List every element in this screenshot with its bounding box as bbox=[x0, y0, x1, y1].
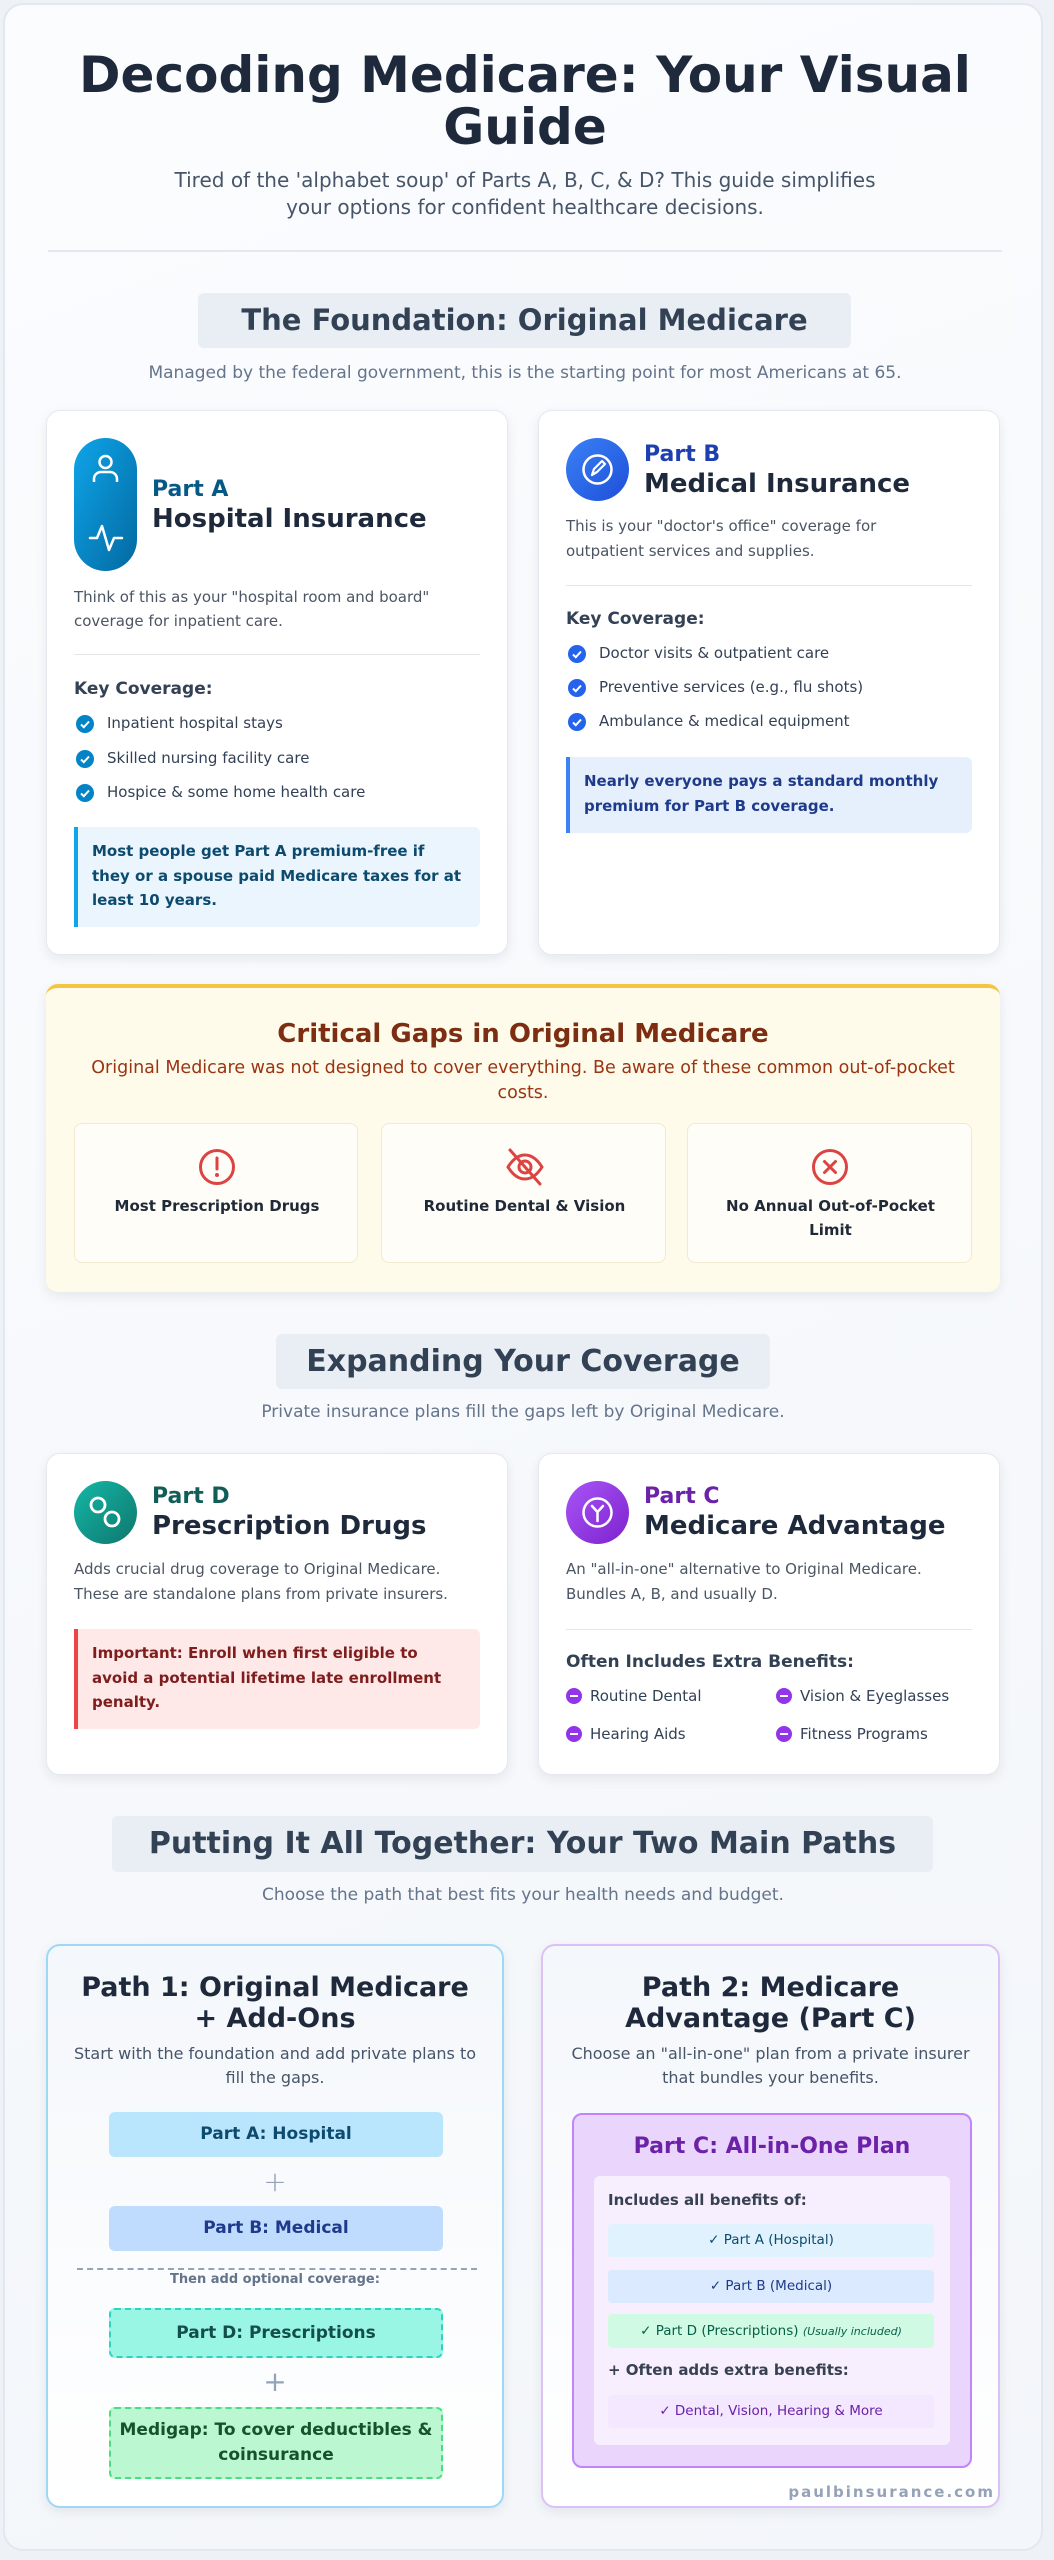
callout: important: Important: Enroll when first eligible to avoid a potential lifetime late enrollment penalty. bbox=[92, 1644, 441, 1711]
path 1 title: Path 1: Original Medicare bbox=[81, 1972, 469, 2003]
callout bbox=[74, 827, 480, 927]
section heading: foundation: The Foundation: Original Medicare bbox=[241, 303, 808, 337]
icon: Part B bbox=[566, 438, 629, 501]
callout: Nearly everyone pays a standard monthly premium for Part B coverage. bbox=[584, 772, 938, 814]
box: Part A: Part A: Hospital bbox=[200, 2124, 352, 2144]
all-in-one plan box: Part C: All-in-One Plan bbox=[634, 2134, 910, 2159]
panel: Part D: Part D bbox=[152, 1484, 230, 1509]
gaps subtitle: Original Medicare was not designed to cover everything. Be aware of these common out-of-pocket bbox=[91, 1058, 955, 1078]
label: optional: Then add optional coverage: bbox=[170, 2272, 380, 2287]
panel: Part B bbox=[538, 410, 1000, 955]
box: Part B: Part B: Medical bbox=[203, 2218, 349, 2238]
key coverage list: Preventive services (e.g., flu shots) bbox=[599, 678, 863, 696]
icon: Part C bbox=[566, 1481, 629, 1544]
path 1 title: + Add-Ons bbox=[194, 2003, 356, 2034]
path 2 title: Advantage (Part C) bbox=[625, 2003, 916, 2034]
panel: Part D bbox=[46, 1453, 508, 1775]
gaps title: Critical Gaps in Original Medicare bbox=[277, 1019, 769, 1049]
title: Decoding Medicare: Your Visual bbox=[79, 46, 971, 104]
section subtext: Private insurance plans fill the gaps left by Original Medicare. bbox=[261, 1402, 785, 1422]
extra benefits bbox=[566, 1652, 949, 1743]
description: Think of this as your "hospital room and board" coverage for inpatient care. bbox=[74, 588, 429, 630]
key coverage list: Key Coverage: bbox=[74, 679, 213, 699]
panel: path 2 bbox=[541, 1944, 1000, 2508]
key coverage list: Ambulance & medical equipment bbox=[599, 712, 850, 730]
inner benefits list: ✓ Part B (Medical) bbox=[710, 2278, 832, 2294]
extra benefits: Often Includes Extra Benefits: bbox=[566, 1652, 854, 1672]
callout bbox=[566, 757, 972, 833]
key coverage list bbox=[74, 679, 365, 802]
section heading: expanding bbox=[276, 1334, 770, 1389]
subtitle: Tired of the 'alphabet soup' of Parts A, B, C, & D? This guide simplifies bbox=[175, 168, 875, 192]
box: Part A bbox=[109, 2112, 443, 2157]
description: An "all-in-one" alternative to Original Medicare. Bundles A, B, and usually D. bbox=[566, 1560, 922, 1603]
callout: important bbox=[74, 1629, 480, 1729]
extra benefits: Vision & Eyeglasses bbox=[800, 1687, 949, 1705]
panel: Part C: Medicare Advantage bbox=[644, 1511, 945, 1541]
box: Medigap bbox=[109, 2407, 443, 2479]
icon: Part D bbox=[74, 1481, 137, 1544]
panel: Part C: Part C bbox=[644, 1484, 720, 1509]
inner benefits list: + Often adds extra benefits: bbox=[608, 2361, 849, 2379]
inner benefits list bbox=[594, 2176, 950, 2445]
section heading: expanding: Expanding Your Coverage bbox=[306, 1344, 740, 1379]
panel: Part A bbox=[46, 410, 508, 955]
path 2 title bbox=[625, 1972, 916, 2034]
gap: drugs: Most Prescription Drugs bbox=[115, 1197, 319, 1215]
all-in-one plan box bbox=[572, 2113, 972, 2468]
section heading: paths: Putting It All Together: Your Two Main Paths bbox=[149, 1826, 896, 1861]
panel: path 1: + bbox=[263, 2165, 287, 2198]
key coverage list: Doctor visits & outpatient care bbox=[599, 644, 829, 662]
section subtext: Managed by the federal government, this is the starting point for most Americans at 65. bbox=[148, 363, 902, 383]
inner benefits list: ✓ Part A (Hospital) bbox=[708, 2232, 834, 2248]
gap: dental vision: Routine Dental & Vision bbox=[424, 1197, 625, 1215]
path 1 desc: Start with the foundation and add private plans to fill the gaps. bbox=[74, 2044, 476, 2087]
section heading: foundation bbox=[198, 293, 851, 348]
subtitle bbox=[174, 168, 875, 219]
panel: Part C bbox=[538, 1453, 1000, 1775]
key coverage list: Skilled nursing facility care bbox=[107, 749, 309, 767]
footer: website: paulbinsurance.com bbox=[788, 2483, 995, 2501]
box: Part D: Part D: Prescriptions bbox=[176, 2323, 376, 2343]
panel: Part B: Medical Insurance bbox=[644, 469, 910, 499]
path 2 title: Path 2: Medicare bbox=[642, 1972, 899, 2003]
key coverage list: Inpatient hospital stays bbox=[107, 714, 283, 732]
icon: Part A pill bbox=[74, 438, 137, 571]
gap: drugs bbox=[74, 1123, 358, 1263]
panel: critical gaps bbox=[46, 984, 1000, 1292]
inner benefits list: ✓ Dental, Vision, Hearing & More bbox=[659, 2403, 883, 2419]
key coverage list bbox=[566, 609, 863, 731]
section heading: paths bbox=[112, 1816, 933, 1872]
panel: Part D: Prescription Drugs bbox=[152, 1511, 427, 1541]
gaps subtitle: costs. bbox=[498, 1083, 548, 1103]
label: Part A bbox=[152, 477, 228, 502]
panel: Part A: Hospital Insurance bbox=[152, 504, 427, 534]
description: Adds crucial drug coverage to Original Medicare. These are standalone plans from private insurers. bbox=[74, 1560, 448, 1603]
box: Medigap: Medigap: To cover deductibles & coinsurance bbox=[120, 2420, 432, 2465]
key coverage list: Hospice & some home health care bbox=[107, 783, 365, 801]
title: Guide bbox=[443, 98, 607, 156]
inner benefits list: ✓ Part D (Prescriptions) (Usually included) bbox=[640, 2323, 902, 2339]
subtitle: your options for confident healthcare decisions. bbox=[286, 195, 764, 219]
panel: path 1 bbox=[46, 1944, 504, 2508]
box: Part B bbox=[109, 2206, 443, 2251]
gaps subtitle bbox=[91, 1058, 955, 1103]
callout: Most people get Part A premium-free if they or a spouse paid Medicare taxes for at least 10 years. bbox=[92, 842, 461, 909]
gap: dental vision bbox=[381, 1123, 666, 1263]
inner benefits list: Includes all benefits of: bbox=[608, 2191, 807, 2209]
extra benefits: Routine Dental bbox=[590, 1687, 702, 1705]
gap: no limit bbox=[687, 1123, 972, 1263]
panel: Part B: Part B bbox=[644, 442, 720, 467]
title bbox=[79, 46, 971, 156]
extra benefits: Hearing Aids bbox=[590, 1725, 686, 1743]
extra benefits: Fitness Programs bbox=[800, 1725, 928, 1743]
box: Part D bbox=[109, 2308, 443, 2358]
section subtext: Choose the path that best fits your health needs and budget. bbox=[262, 1885, 784, 1905]
path 1 title bbox=[81, 1972, 469, 2034]
key coverage list: Key Coverage: bbox=[566, 609, 705, 629]
path 2 desc: Choose an "all-in-one" plan from a private insurer that bundles your benefits. bbox=[571, 2044, 970, 2087]
gap: no limit: No Annual Out-of-Pocket Limit bbox=[726, 1197, 935, 1239]
description: This is your "doctor's office" coverage for outpatient services and supplies. bbox=[566, 517, 876, 560]
panel: path 1: + bbox=[263, 2365, 287, 2398]
